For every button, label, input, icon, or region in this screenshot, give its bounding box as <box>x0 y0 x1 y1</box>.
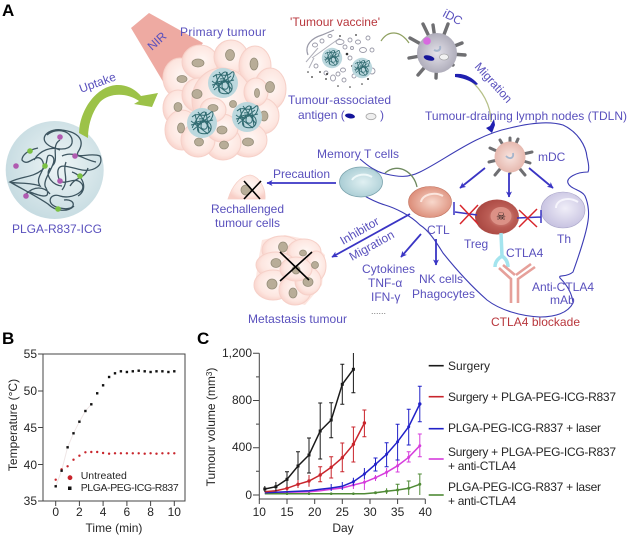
x axis tick labels: 10 <box>253 505 266 519</box>
series: untreated <box>54 451 176 481</box>
x axis tick labels <box>253 505 432 519</box>
anti-CTLA4 antibody <box>499 264 535 303</box>
y axis tick labels: 0 <box>245 488 252 502</box>
tumour-associated antigen debris <box>306 30 375 88</box>
x axis tick labels: 6 <box>124 505 131 519</box>
CTLA4 blockade label: CTLA4 blockade <box>491 315 580 329</box>
faint connecting lines <box>56 404 91 486</box>
chart B legend: PLGA-PEG-ICG-R837 <box>81 482 179 494</box>
chart C legend: Surgery + PLGA-PEG-ICG-R837 <box>448 390 616 404</box>
precaution label: Precaution <box>273 167 330 181</box>
Treg label: Treg <box>464 237 488 251</box>
x axis tick labels: 25 <box>336 505 349 519</box>
y axis tick labels: 55 <box>24 347 37 361</box>
NIR label: NIR <box>145 29 170 53</box>
memory T cells label: Memory T cells <box>317 147 399 161</box>
y axis tick labels <box>24 347 37 508</box>
y axis tick labels <box>222 346 252 502</box>
series: laser <box>265 386 422 493</box>
anti-CTLA4 label: Anti-CTLA4 <box>532 280 594 294</box>
arrow: CTL to memory T cell <box>385 168 417 187</box>
series: PLGA-PEG-ICG-R837 <box>54 370 176 488</box>
NK cells and phagocytes label: Phagocytes <box>412 287 475 301</box>
uptake arrow <box>79 85 158 138</box>
NK cells and phagocytes label <box>412 272 475 301</box>
chart C legend: PLGA-PEG-ICG-R837 + laser <box>448 421 601 435</box>
x axis tick labels: 40 <box>419 505 432 519</box>
series: surgery <box>263 353 355 492</box>
arrow: mDC to Treg <box>508 173 510 197</box>
chart C legend: Surgery + PLGA-PEG-ICG-R837 <box>448 445 616 459</box>
x axis tick labels: 8 <box>147 505 154 519</box>
tumour vaccine label: 'Tumour vaccine' <box>290 15 380 29</box>
TDLN label: Tumour-draining lymph nodes (TDLN) <box>425 109 627 123</box>
rechallenged label: tumour cells <box>215 216 280 230</box>
cytokines list: TNF-α <box>368 276 402 290</box>
arrow: antigen to iDC <box>381 33 409 43</box>
Th cell <box>541 192 585 228</box>
x axis tick labels <box>52 505 181 519</box>
uptake label: Uptake <box>77 70 118 96</box>
mDC cell <box>489 138 532 175</box>
x axis title: Time (min) <box>86 521 142 535</box>
NK cells and phagocytes label: NK cells <box>419 272 463 286</box>
x axis tick labels: 0 <box>52 505 59 519</box>
chart C legend: PLGA-PEG-ICG-R837 + laser <box>448 480 601 494</box>
cytokines list: Cytokines <box>362 262 415 276</box>
tumour-associated antigen label: antigen ( <box>298 108 345 122</box>
metastasis label: Metastasis tumour <box>248 312 347 326</box>
series: surgery + anti-CTLA4 combined <box>265 434 422 493</box>
NIR beam <box>131 13 203 90</box>
rechallenged label: Rechallenged <box>211 202 284 216</box>
inhibition Treg to Th blocked <box>517 209 541 227</box>
chart C: tumour volume <box>204 346 616 535</box>
tumour-associated antigen label: ) <box>380 108 384 122</box>
inhibitor migration arrow <box>332 214 410 257</box>
y axis tick labels: 1,200 <box>222 346 252 360</box>
x axis tick labels: 15 <box>280 505 294 519</box>
y axis title: ) <box>204 368 218 372</box>
CTL label: CTL <box>427 223 450 237</box>
chart C legend: + anti-CTLA4 <box>448 494 516 508</box>
tumour-associated antigen label: Tumour-associated <box>288 93 391 107</box>
chart B legend: Untreated <box>81 470 127 482</box>
anti-CTLA4 label <box>532 280 594 307</box>
nanoparticle label: PLGA-R837-ICG <box>12 222 102 236</box>
memory T cell <box>340 167 382 197</box>
x axis tick labels: 4 <box>100 505 107 519</box>
y axis tick labels: 35 <box>24 494 37 508</box>
x axis tick labels: 30 <box>363 505 377 519</box>
arrow: mDC to CTL <box>460 168 485 188</box>
y axis tick labels: 45 <box>24 421 37 435</box>
metastasis tumour cluster <box>254 235 326 305</box>
chart B legend <box>68 470 179 494</box>
primary tumour cluster <box>163 40 286 160</box>
inhibition CTL to Treg blocked <box>454 202 478 224</box>
primary tumour label: Primary tumour <box>180 25 266 39</box>
Treg cell: ☠ <box>496 211 506 223</box>
x axis tick labels: 20 <box>308 505 322 519</box>
migration arrow <box>455 74 495 133</box>
arrow: CTL to cytokines <box>401 234 421 257</box>
x axis tick labels: 35 <box>391 505 405 519</box>
arrow: mDC to Th <box>529 168 553 188</box>
nanoparticle PLGA-R837-ICG <box>6 121 104 219</box>
precaution arrow <box>267 182 336 184</box>
mDC label: mDC <box>538 150 566 164</box>
chart C legend: Surgery <box>448 359 490 373</box>
migration label: Migration <box>472 60 515 106</box>
Th label: Th <box>557 232 571 246</box>
CTLA4 label: CTLA4 <box>506 246 544 260</box>
CTL cell <box>408 186 452 218</box>
series: surgery + PLGA-PEG-ICG-R837 <box>265 410 366 492</box>
iDC cell <box>409 24 465 78</box>
rechallenged tumour cell <box>228 175 265 199</box>
anti-CTLA4 label: mAb <box>550 293 575 307</box>
cytokines list: IFN-γ <box>371 290 400 304</box>
CTLA4 receptor <box>495 233 508 267</box>
chart C legend <box>429 359 616 508</box>
x axis title: Day <box>332 521 354 535</box>
tumour-associated antigen label <box>288 93 391 122</box>
Treg cell <box>475 200 519 234</box>
y axis title: Tumour volume (mm <box>204 376 218 486</box>
y axis tick labels: 40 <box>24 458 37 472</box>
x axis tick labels: 2 <box>76 505 83 519</box>
y axis tick labels: 400 <box>232 440 252 454</box>
panel label A: A <box>2 1 14 20</box>
iDC label: iDC <box>441 6 465 28</box>
y axis tick labels: 800 <box>232 393 252 407</box>
panel label B: B <box>2 329 14 348</box>
chart C legend: + anti-CTLA4 <box>448 459 516 473</box>
arrow: CTL to NK cells <box>435 239 437 265</box>
panel label C: C <box>197 329 209 348</box>
y axis title: Temperature (°C) <box>6 379 20 471</box>
x axis tick labels: 10 <box>168 505 181 519</box>
y axis tick labels: 50 <box>24 384 37 398</box>
chart B: temperature <box>6 347 185 535</box>
inhibitor label: Inhibitor <box>338 214 381 248</box>
lymph node outline <box>360 123 589 317</box>
rechallenged label <box>211 202 284 230</box>
migration label lower: Migration <box>347 227 397 264</box>
cytokines list: ...... <box>371 306 386 316</box>
y axis title: 3 <box>205 371 214 376</box>
series: laser + anti-CTLA4 <box>265 474 422 495</box>
cytokines list <box>362 262 415 316</box>
